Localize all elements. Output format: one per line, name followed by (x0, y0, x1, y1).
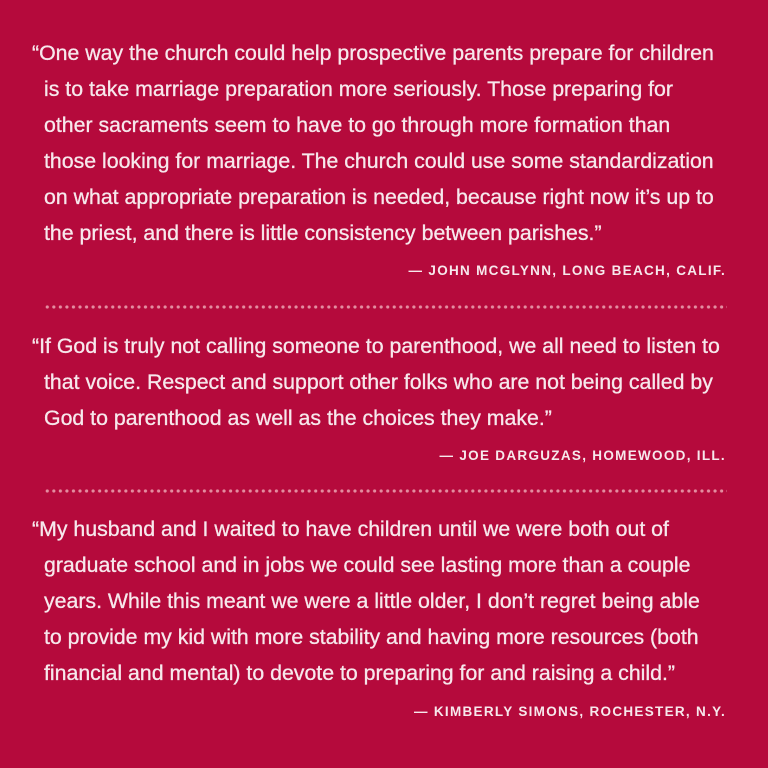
quote 1: those looking for marriage. The church could use some standardization (44, 149, 714, 173)
attribution 2: — JOE DARGUZAS, HOMEWOOD, ILL. (439, 448, 726, 463)
quote 3: financial and mental) to devote to preparing for and raising a child.” (44, 661, 675, 685)
quote 1: on what appropriate preparation is needed, because right now it’s up to (44, 185, 714, 209)
quote 3: to provide my kid with more stability and having more resources (both (44, 625, 699, 649)
quote 3: graduate school and in jobs we could see lasting more than a couple (44, 553, 690, 577)
attribution 1: — JOHN MCGLYNN, LONG BEACH, CALIF. (409, 263, 726, 278)
quote 3 (32, 517, 700, 685)
quote 2 (32, 334, 720, 430)
attribution 3: — KIMBERLY SIMONS, ROCHESTER, N.Y. (414, 704, 726, 719)
quote 2: that voice. Respect and support other folks who are not being called by (44, 370, 713, 394)
quote 2: God to parenthood as well as the choices they make.” (44, 406, 552, 430)
quote 2: “If God is truly not calling someone to parenthood, we all need to listen to (32, 334, 720, 358)
quote 1: is to take marriage preparation more seriously. Those preparing for (44, 77, 673, 101)
quote 1: other sacraments seem to have to go through more formation than (44, 113, 670, 137)
quote 3: “My husband and I waited to have children until we were both out of (32, 517, 669, 541)
quote 3: years. While this meant we were a little older, I don’t regret being able (44, 589, 700, 613)
quote 1: “One way the church could help prospective parents prepare for children (32, 41, 714, 65)
quote 1 (32, 41, 714, 245)
quote 1: the priest, and there is little consistency between parishes.” (44, 221, 602, 245)
